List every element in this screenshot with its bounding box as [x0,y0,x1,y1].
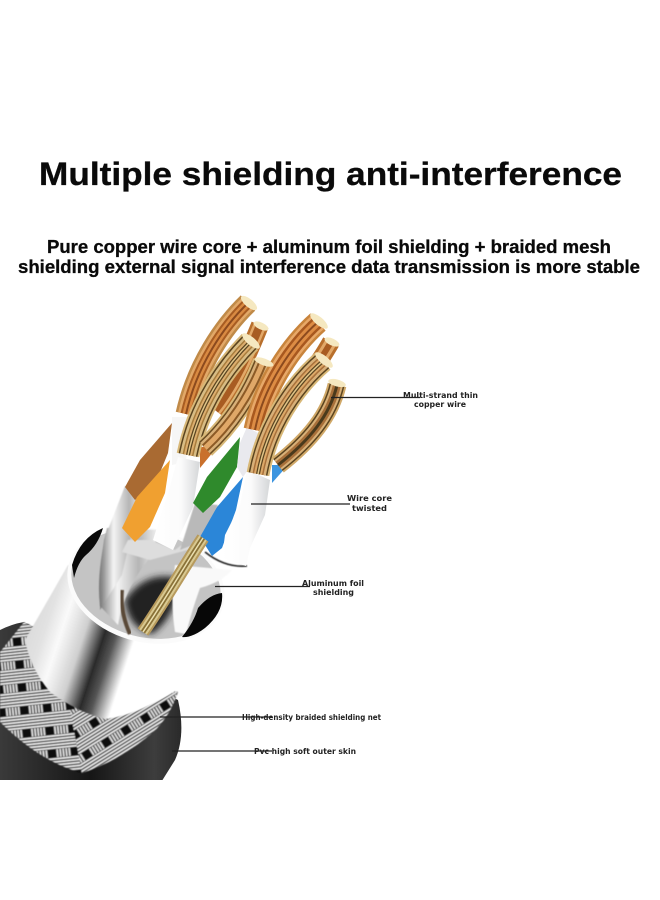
callout: wire core twisted [251,494,393,513]
wire: white rear right [237,427,258,477]
wire: white rear left [172,417,187,464]
callout: aluminum foil shielding: shielding [313,588,354,597]
callout: pvc outer skin: Pvc high soft outer skin [254,747,356,756]
callout: aluminum foil shielding [215,579,364,597]
title: Multiple shielding anti-interference [39,156,622,192]
wire: copper-orange stub [200,446,211,468]
callout: multi-strand thin copper wire [331,391,478,409]
wire: white front right [222,470,270,566]
callout: multi-strand thin copper wire: copper wire [414,400,467,409]
strand tips [239,294,347,389]
strand 3 [188,342,250,455]
callout: wire core twisted: Wire core [347,494,393,503]
callout: multi-strand thin copper wire: Multi-strand thin [403,391,478,400]
braided shielding [0,622,178,773]
wire: white front left [153,457,200,550]
subtitle: Pure copper wire core + aluminum foil shielding + braided mesh [47,237,611,257]
strand 5 [255,322,318,430]
foil tubes behind wires [100,486,247,610]
strand 9: front centre [143,538,203,632]
subtitle [18,237,640,277]
copper strands [143,294,347,632]
strand 7 [258,361,323,474]
strand 4 [205,362,263,448]
strand 1 [186,303,248,414]
foil opening [68,528,222,640]
callout: wire core twisted: twisted [352,504,387,513]
wire: green [193,437,240,513]
cable cross-section illustration [0,294,347,784]
subtitle: shielding external signal interference data transmission is more stable [18,257,640,277]
callout: aluminum foil shielding: Aluminum foil [302,579,364,588]
strand 8 [278,385,337,465]
pvc outer skin [0,622,181,784]
strand 2 [215,325,260,410]
wire: orange [122,460,170,542]
foil cylinder body [24,565,176,720]
callout: braided shielding net: High-density braided shielding net [242,713,381,722]
wire: blue [200,465,288,556]
wire: brown [125,423,172,500]
strand 6 [312,337,339,361]
